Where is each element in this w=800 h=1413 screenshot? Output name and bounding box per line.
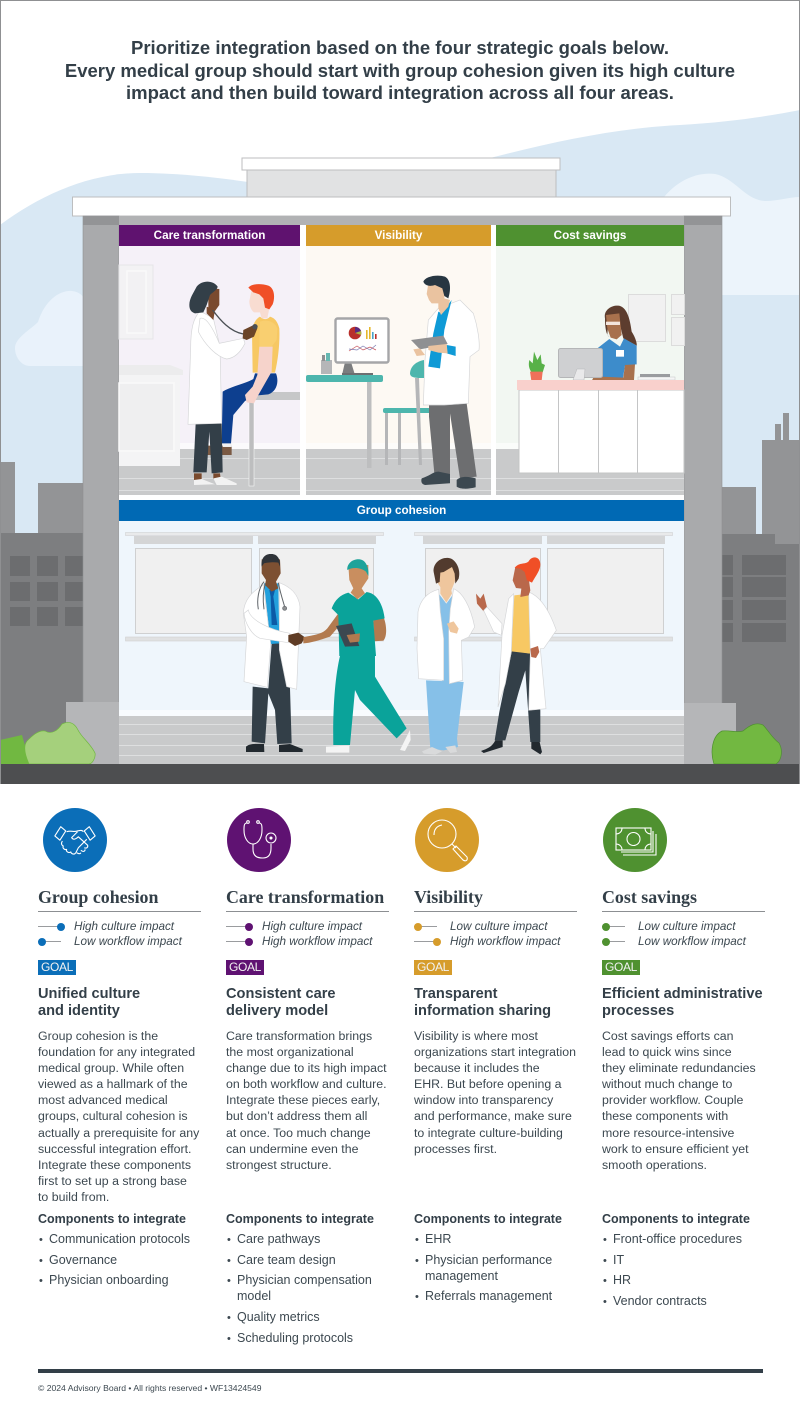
- goal tag: GOAL: [605, 960, 637, 974]
- components list: HR: [613, 1273, 631, 1287]
- impact: low culture: Low culture impact: [450, 920, 547, 933]
- description: [602, 1029, 756, 1172]
- room: care transformation: [0, 0, 800, 784]
- description: lead to quick wins since: [602, 1045, 732, 1059]
- wall frames: [628, 294, 684, 346]
- monitor with charts: [336, 318, 388, 375]
- description: viewed as a hallmark of the: [38, 1077, 188, 1091]
- goal title: Unified culture: [38, 986, 140, 1002]
- components list: EHR: [425, 1232, 451, 1246]
- doctor with stethoscope: [188, 282, 258, 485]
- panel: cost savings: [602, 808, 765, 1308]
- components list: Quality metrics: [237, 1310, 320, 1324]
- components list: Communication protocols: [49, 1232, 190, 1246]
- description: foundation for any integrated: [38, 1045, 195, 1059]
- icon: cash stack: [603, 808, 667, 872]
- description: Cost savings efforts can: [602, 1029, 734, 1043]
- heading: Visibility: [414, 887, 483, 907]
- background city buildings left: [0, 462, 85, 765]
- desk: [306, 375, 383, 468]
- panel: visibility: [414, 808, 577, 1303]
- components list: Governance: [49, 1253, 117, 1267]
- goal title: delivery model: [226, 1003, 328, 1019]
- description: provider workflow. Couple: [602, 1093, 743, 1107]
- components list: Referrals management: [425, 1289, 552, 1303]
- impact: high culture: High culture impact: [74, 920, 174, 933]
- description: processes first.: [414, 1142, 497, 1156]
- impact: low workflow: Low workflow impact: [74, 935, 182, 948]
- goal title: processes: [602, 1003, 674, 1019]
- components list: Physician onboarding: [49, 1273, 169, 1287]
- impact: high workflow: High workflow impact: [262, 935, 372, 948]
- goal tag: GOAL: [41, 960, 73, 974]
- room: group cohesion: [119, 521, 684, 764]
- goal title: Consistent care: [226, 986, 336, 1002]
- description: window into transparency: [414, 1093, 553, 1107]
- components list: Front-office procedures: [613, 1232, 742, 1246]
- street: [0, 764, 800, 784]
- header: care transformation: [119, 225, 300, 246]
- exam table: [249, 392, 300, 486]
- description: Group cohesion is the: [38, 1029, 158, 1043]
- components list: Care pathways: [237, 1232, 320, 1246]
- goal tag: GOAL: [229, 960, 261, 974]
- stack of papers: [638, 374, 675, 380]
- room: cost savings: [496, 246, 684, 495]
- heading: Care transformation: [226, 887, 384, 907]
- description: successful integration effort.: [38, 1142, 191, 1156]
- description: Care transformation brings: [226, 1029, 372, 1043]
- impact: low workflow: Low workflow impact: [638, 935, 746, 948]
- doctor shaking hands: [243, 554, 305, 752]
- description: strongest structure.: [226, 1158, 332, 1172]
- components list: model: [237, 1289, 271, 1303]
- physician with tablet: [411, 276, 479, 489]
- goal title: and identity: [38, 1003, 120, 1019]
- heading: [414, 885, 577, 912]
- right shrub: [712, 724, 781, 764]
- description: at once. Too much change: [226, 1126, 371, 1140]
- description: work to ensure efficient yet: [602, 1142, 749, 1156]
- description: smooth operations.: [602, 1158, 707, 1172]
- reception desk: [517, 380, 684, 473]
- icon: stethoscope: [227, 808, 291, 872]
- description: to integrate culture-building: [414, 1126, 563, 1140]
- description: to build from.: [38, 1190, 109, 1204]
- label: visibility: Visibility: [375, 229, 422, 242]
- icon: handshake: [43, 808, 107, 872]
- pen cup: [321, 353, 332, 374]
- description: first to set up a strong base: [38, 1174, 187, 1188]
- description: without much change to: [602, 1077, 732, 1091]
- goal title: [602, 986, 763, 1019]
- impact: high workflow: High workflow impact: [450, 935, 560, 948]
- description: Integrate these pieces early,: [226, 1093, 380, 1107]
- footer rule: [38, 1369, 763, 1373]
- left shrub: [0, 722, 95, 764]
- description: actually a prerequisite for any: [38, 1126, 199, 1140]
- label: care transformation: Care transformation: [154, 229, 265, 242]
- goal title: [414, 986, 551, 1019]
- components list: [39, 1232, 190, 1287]
- goal title: information sharing: [414, 1003, 551, 1019]
- description: EHR. But before opening a: [414, 1077, 562, 1091]
- room: visibility: [306, 246, 491, 495]
- description: they eliminate redundancies: [602, 1061, 756, 1075]
- goal title: Transparent: [414, 986, 498, 1002]
- description: can undermine even the: [226, 1142, 358, 1156]
- roof structure: [72, 158, 730, 216]
- components heading: Components to integrate: [226, 1212, 374, 1226]
- description: Visibility is where most: [414, 1029, 538, 1043]
- heading: Group cohesion: [38, 887, 158, 907]
- components heading: Components to integrate: [414, 1212, 562, 1226]
- computer monitor: [558, 348, 602, 380]
- goal title: Efficient administrative: [602, 986, 763, 1002]
- impact: low culture: Low culture impact: [638, 920, 735, 933]
- title: Prioritize integration based on the four strategic goals below.: [131, 37, 669, 58]
- components list: Vendor contracts: [613, 1294, 707, 1308]
- title: [65, 37, 735, 103]
- icon: magnifying glass: [415, 808, 479, 872]
- title: Every medical group should start with group cohesion given its high culture: [65, 60, 735, 81]
- sky background: [0, 110, 800, 780]
- components list: [227, 1232, 372, 1345]
- description: change due to its high impact: [226, 1061, 387, 1075]
- components heading: Components to integrate: [602, 1212, 750, 1226]
- components heading: Components to integrate: [38, 1212, 186, 1226]
- components list: IT: [613, 1253, 624, 1267]
- page edge: [0, 0, 800, 784]
- description: [414, 1029, 576, 1156]
- impact: high culture: High culture impact: [262, 920, 362, 933]
- description: [226, 1029, 387, 1172]
- background city buildings right: [722, 413, 800, 765]
- receptionist: [592, 306, 637, 381]
- label: group cohesion: Group cohesion: [357, 504, 446, 517]
- components list: [415, 1232, 552, 1303]
- physician in blue scrubs: [417, 558, 475, 755]
- right windows: [414, 532, 672, 641]
- header: cost savings: [496, 225, 684, 246]
- description: groups, cultural cohesion is: [38, 1109, 188, 1123]
- goal title: [38, 986, 140, 1019]
- description: because it includes the: [414, 1061, 540, 1075]
- header: group cohesion: [119, 500, 684, 521]
- wall cabinet: [119, 265, 153, 339]
- panel: group cohesion: [38, 808, 201, 1287]
- description: organizations start integration: [414, 1045, 576, 1059]
- heading: [38, 885, 201, 912]
- goal tag: GOAL: [417, 960, 449, 974]
- description: on both workflow and culture.: [226, 1077, 387, 1091]
- left windows: [126, 532, 384, 641]
- potted plant: [529, 352, 545, 381]
- heading: Cost savings: [602, 887, 697, 907]
- physician with red hair: [476, 557, 556, 754]
- description: Integrate these components: [38, 1158, 191, 1172]
- goal title: [226, 986, 336, 1019]
- panel: care transformation: [226, 808, 389, 1345]
- description: but don’t address them all: [226, 1109, 367, 1123]
- components list: Scheduling protocols: [237, 1331, 353, 1345]
- components list: management: [425, 1269, 498, 1283]
- description: more resource-intensive: [602, 1126, 734, 1140]
- components list: Care team design: [237, 1253, 336, 1267]
- teal stool: [383, 360, 433, 465]
- description: the most organizational: [226, 1045, 354, 1059]
- building frame: [66, 216, 736, 765]
- footer copyright: © 2024 Advisory Board • All rights reserved • WF13424549: [38, 1383, 262, 1393]
- counter: [119, 365, 183, 466]
- building illustration: [0, 0, 800, 784]
- description: most advanced medical: [38, 1093, 168, 1107]
- components list: Physician compensation: [237, 1273, 372, 1287]
- patient: [207, 284, 279, 455]
- description: and performance, make sure: [414, 1109, 572, 1123]
- description: medical group. While often: [38, 1061, 184, 1075]
- components list: [603, 1232, 742, 1308]
- components list: Physician performance: [425, 1253, 552, 1267]
- description: [38, 1029, 200, 1204]
- title: impact and then build toward integration across all four areas.: [126, 82, 674, 103]
- header: visibility: [306, 225, 491, 246]
- heading: [602, 885, 765, 912]
- label: cost savings: Cost savings: [554, 229, 626, 242]
- description: these components with: [602, 1109, 728, 1123]
- nurse in teal scrubs: [303, 559, 411, 753]
